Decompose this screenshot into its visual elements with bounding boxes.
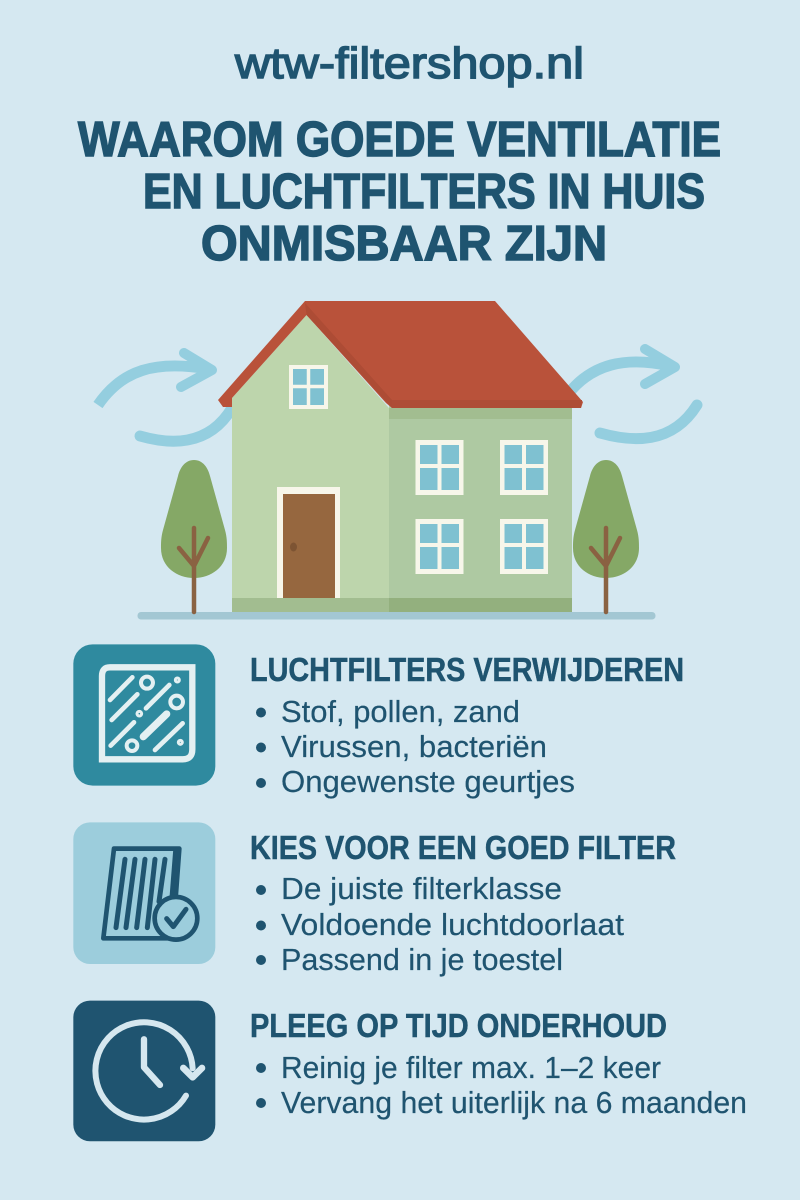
- list: [256, 871, 624, 977]
- title: [78, 113, 721, 271]
- list: De juiste filterklasse: [281, 871, 562, 906]
- list: Virussen, bacteriën: [281, 729, 547, 764]
- arrow: air in, upper: [98, 353, 212, 405]
- list: Reinig je filter max. 1–2 keer: [281, 1050, 661, 1085]
- arrow: air in, lower: [140, 408, 232, 441]
- title: EN LUCHTFILTERS IN HUIS: [143, 165, 705, 219]
- title: WAAROM GOEDE VENTILATIE: [78, 113, 721, 167]
- heading: PLEEG OP TIJD ONDERHOUD: [250, 1007, 667, 1044]
- door: [277, 487, 340, 598]
- title: ONMISBAAR ZIJN: [201, 217, 607, 271]
- house walls: [232, 315, 572, 612]
- list: [256, 694, 575, 799]
- tree: left: [161, 460, 227, 612]
- roof: [218, 301, 583, 408]
- list: Stof, pollen, zand: [281, 694, 520, 729]
- panel: maintenance: [73, 1001, 747, 1141]
- heading: KIES VOOR EEN GOED FILTER: [250, 829, 676, 866]
- arrow: air out, lower: [600, 405, 697, 439]
- site name: wtw-filtershop.nl: [234, 39, 584, 88]
- illustration: house with airflow: [98, 301, 697, 620]
- icon: filter with check: [73, 822, 215, 964]
- panel: choose a good filter: [73, 822, 676, 977]
- list: Passend in je toestel: [281, 942, 563, 977]
- tree: right: [573, 460, 639, 612]
- list: Voldoende luchtdoorlaat: [281, 907, 624, 942]
- arrow: air out, upper: [568, 349, 675, 394]
- ground: [138, 612, 656, 620]
- windows: side wall: [416, 440, 548, 574]
- heading: LUCHTFILTERS VERWIJDEREN: [250, 651, 684, 688]
- list: Vervang het uiterlijk na 6 maanden: [281, 1085, 747, 1120]
- panel: air filters: [73, 644, 684, 799]
- window: gable: [289, 365, 328, 409]
- icon: clock with arrow: [73, 1001, 215, 1141]
- list: Ongewenste geurtjes: [281, 764, 575, 799]
- list: [256, 1050, 747, 1120]
- icon: dust filter: [73, 644, 215, 786]
